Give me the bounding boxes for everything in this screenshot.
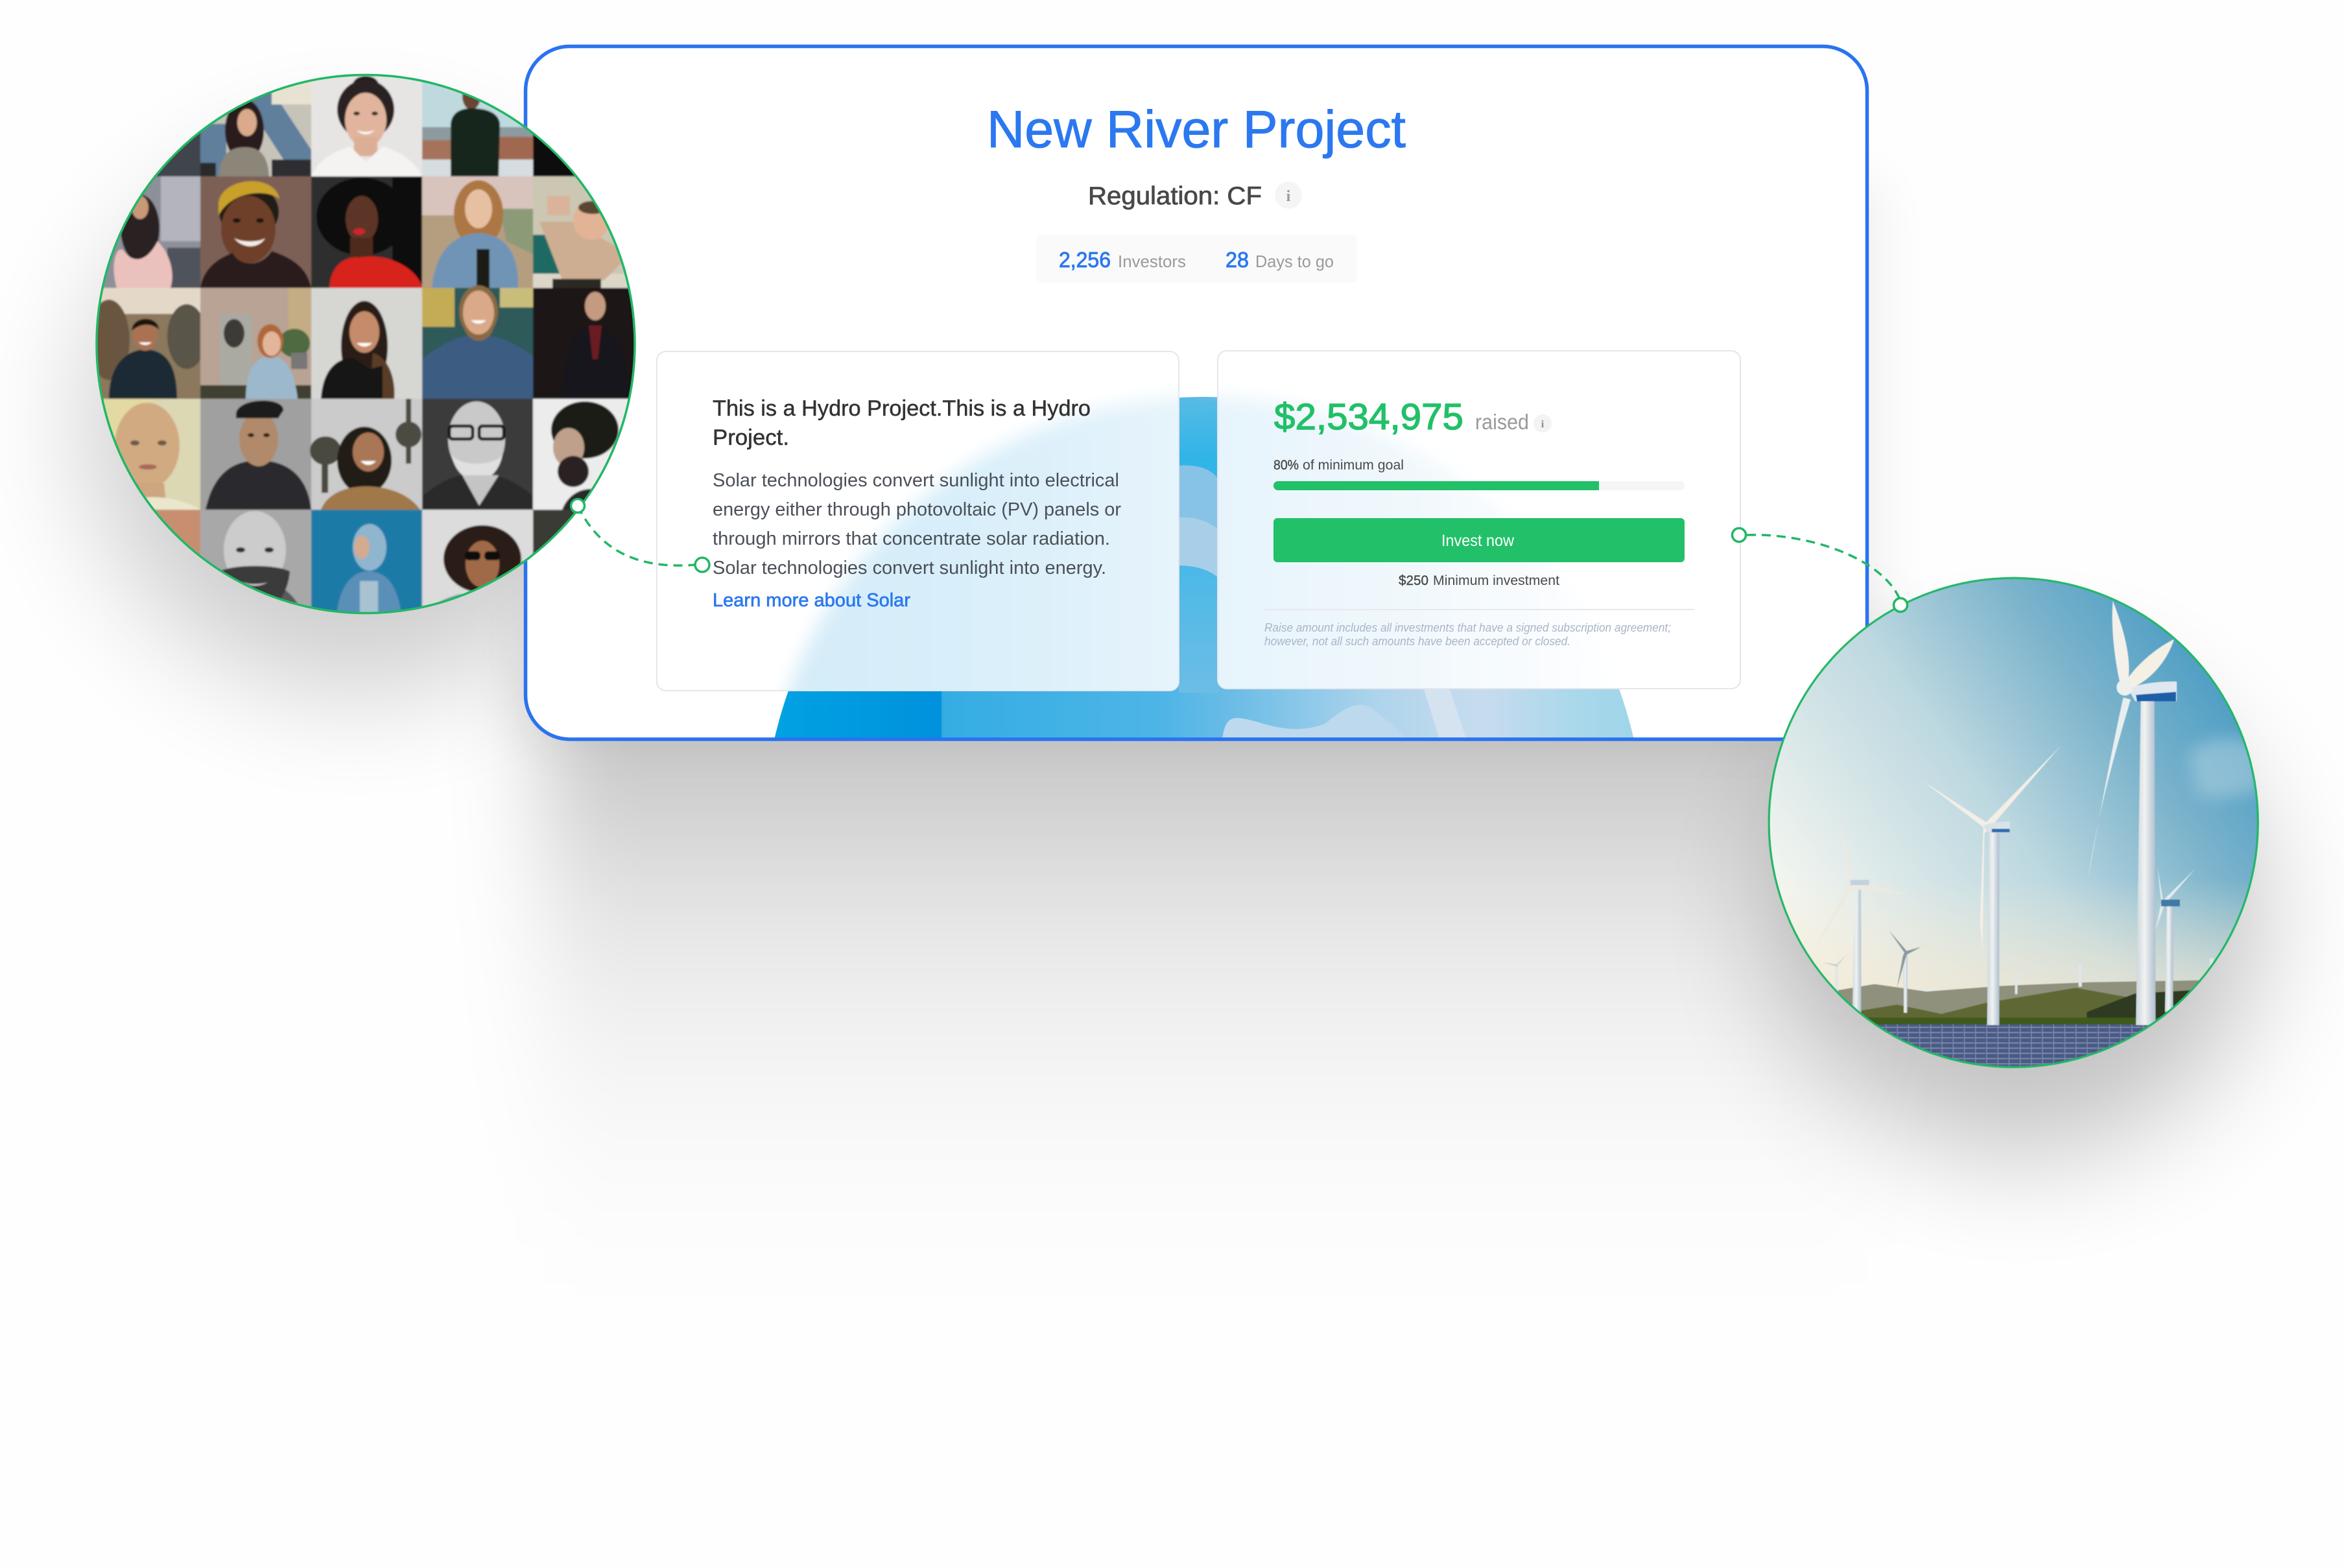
stat: investors: 2,256 <box>1059 248 1111 272</box>
shadow: wind circle <box>1780 674 2260 1154</box>
amount raised: $2,534,975 <box>1274 396 1463 438</box>
link: Learn more about Solar <box>713 590 910 611</box>
border of main card <box>525 47 1867 739</box>
raised label: raised <box>1475 410 1529 434</box>
globe illustration behind cards <box>774 397 1634 738</box>
stat: investors: Investors <box>1118 252 1186 271</box>
icon: info badge: i <box>1541 419 1545 430</box>
card body text <box>713 470 1121 578</box>
turbine: middle <box>1923 746 2061 1025</box>
solar panels <box>1767 1025 2262 1071</box>
fine print: however, not all such amounts have been accepted or closed. <box>1264 635 1570 648</box>
connector: funding card to wind circle <box>1733 528 1908 612</box>
progress bar <box>1273 481 1685 490</box>
regulation line: Regulation: CF <box>1088 182 1262 210</box>
portrait row 5 <box>89 510 644 621</box>
turbine: small far <box>1823 955 2213 994</box>
hills <box>1767 979 2262 1027</box>
stat: investors <box>1059 248 1186 272</box>
goal label: of minimum goal <box>1303 458 1404 473</box>
fine print <box>1264 609 1694 648</box>
fine print: Raise amount includes all investments that have a signed subscription agreement; <box>1264 621 1671 634</box>
connector: people circle to description card <box>571 499 709 572</box>
card body text: through mirrors that concentrate solar radiation. <box>713 529 1110 549</box>
shadow: main card <box>545 648 1867 1297</box>
button: invest now: Invest now <box>1441 532 1515 550</box>
minimum investment: Minimum investment <box>1433 573 1559 588</box>
card body text: Solar technologies convert sunlight into energy. <box>713 558 1106 578</box>
shadow: main card ambient <box>519 182 1880 739</box>
photo circle: investors grid <box>88 65 644 622</box>
panel: funding card <box>1217 350 1741 689</box>
button: invest now <box>1273 518 1685 562</box>
icon: info badge <box>1533 414 1552 433</box>
card heading: Project. <box>713 425 789 450</box>
photo circle: wind turbines <box>1767 576 2262 1071</box>
sky <box>1767 576 2262 1027</box>
shadow: people circle <box>88 152 626 691</box>
goal label: 80% <box>1273 458 1299 473</box>
panel: main project card <box>524 44 1869 741</box>
turbine: large foreground <box>2088 600 2177 1025</box>
portrait row 2 <box>89 176 644 288</box>
border of investors circle <box>97 75 635 613</box>
stats box <box>1036 235 1357 283</box>
turbine: right small <box>2155 867 2196 1012</box>
border of wind circle <box>1769 578 2258 1067</box>
turbine: left pair <box>1812 811 1921 1013</box>
portrait row 4 <box>89 399 644 510</box>
title: New River Project <box>987 101 1406 159</box>
card heading: This is a Hydro Project.This is a Hydro <box>713 396 1091 421</box>
stat: days to go <box>1225 248 1334 272</box>
stat: days to go: 28 <box>1225 248 1249 272</box>
icon: info badge: i <box>1286 188 1291 205</box>
portrait row 3 <box>88 285 644 399</box>
card body text: energy either through photovoltaic (PV) panels or <box>713 499 1121 520</box>
stat: days to go: Days to go <box>1255 252 1334 271</box>
panel: description card <box>656 351 1179 691</box>
card body text: Solar technologies convert sunlight into electrical <box>713 470 1119 491</box>
portrait row 1 <box>89 65 644 176</box>
minimum investment: $250 <box>1399 573 1428 588</box>
card heading <box>713 396 1091 450</box>
icon: info badge <box>1275 182 1302 209</box>
